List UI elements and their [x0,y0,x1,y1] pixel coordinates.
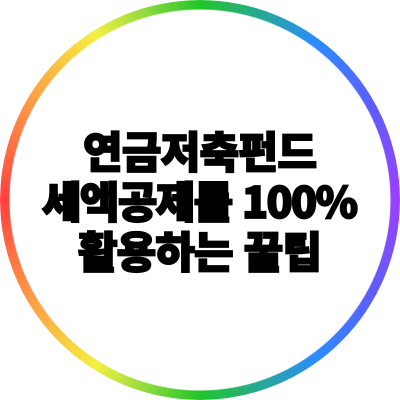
title: 연금저축펀드 [83,119,317,181]
title: 활용하는 꿀팁 [78,219,322,281]
title: 세액공제를 100% [42,169,358,231]
